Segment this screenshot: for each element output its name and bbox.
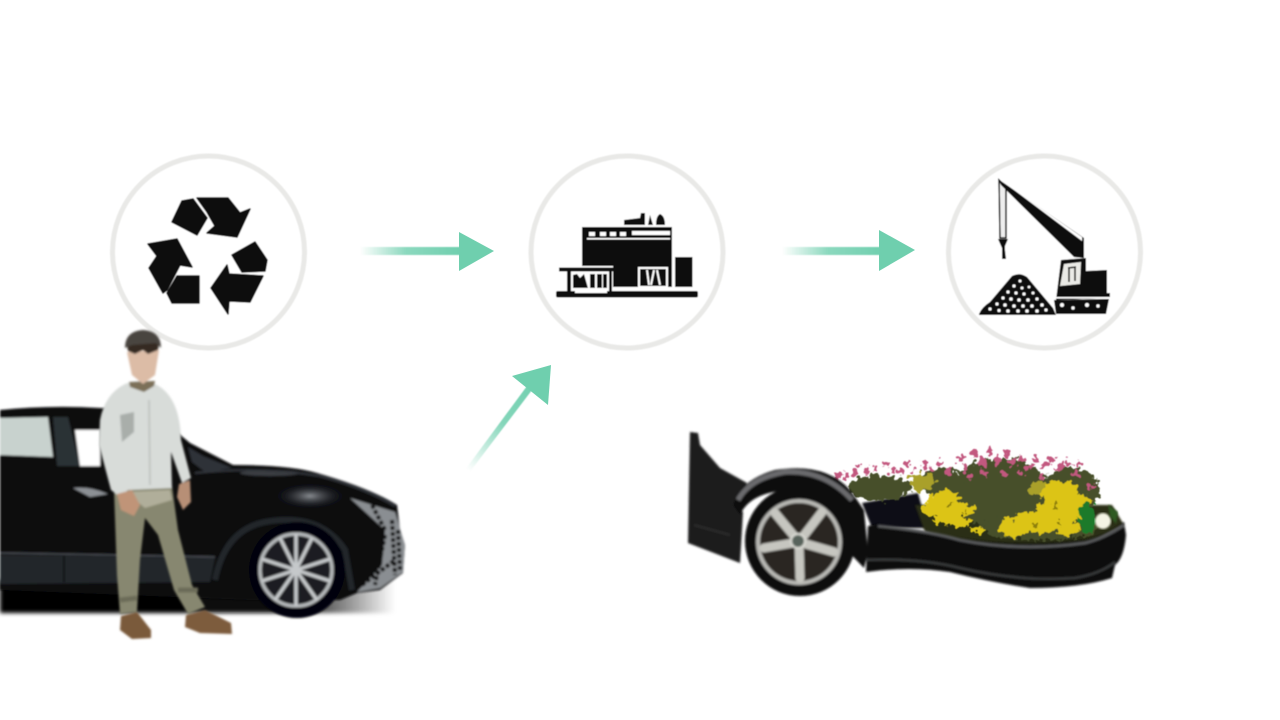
car body <box>0 407 405 618</box>
man shoes <box>120 612 151 639</box>
car ground shadow <box>0 580 395 613</box>
man hair <box>125 330 161 348</box>
planter body <box>688 432 1126 596</box>
man sunglasses <box>127 341 159 354</box>
crane boom <box>998 179 1084 258</box>
car hood shine <box>272 482 348 510</box>
planter mudflap <box>688 432 747 563</box>
planter wheel <box>745 486 855 596</box>
car door handle <box>73 488 108 497</box>
circle: factory <box>531 156 723 348</box>
man hands <box>117 490 140 516</box>
photo: black car with man <box>0 330 405 639</box>
man sweater <box>99 381 191 497</box>
car windows <box>0 417 53 457</box>
foliage <box>848 458 1100 540</box>
arrow: factory to crane <box>782 230 915 271</box>
planter fender <box>733 468 868 568</box>
rubble pile <box>979 274 1056 315</box>
icon: factory building <box>556 213 698 298</box>
arrow: car to factory <box>465 365 551 473</box>
soil base behind flowers <box>915 505 1124 546</box>
circle: recycle <box>112 156 304 348</box>
pink flowers <box>835 448 1096 490</box>
car sill lines <box>0 555 215 584</box>
car wheel <box>249 522 345 618</box>
arrow: recycle to factory <box>360 232 494 271</box>
crane tracks <box>1054 299 1109 314</box>
planter flowers <box>835 448 1100 540</box>
yellow flowers <box>920 481 1091 537</box>
man <box>99 330 232 639</box>
panel: crane step <box>948 156 1140 348</box>
icon: recycle symbol <box>148 198 267 314</box>
white flowers <box>1095 513 1111 529</box>
panel: recycle step <box>112 156 304 348</box>
dark wall behind flowers <box>862 493 928 528</box>
man neck and face <box>129 381 155 392</box>
crane cab <box>1056 258 1110 300</box>
car headlight <box>350 498 405 592</box>
crane cable <box>999 180 1006 238</box>
panel: factory step <box>531 156 723 348</box>
crane hook <box>998 239 1008 259</box>
man trousers <box>114 486 205 614</box>
photo: car front reused as flower planter <box>688 432 1126 596</box>
circle: crane <box>948 156 1140 348</box>
planter tray <box>866 522 1126 588</box>
green shrub <box>1078 503 1096 533</box>
car wheel arch <box>215 520 352 590</box>
icon: crane and rubble pile <box>979 179 1110 315</box>
yellow-green blossom <box>1108 505 1118 524</box>
olive-yellow flowers <box>909 473 1047 496</box>
